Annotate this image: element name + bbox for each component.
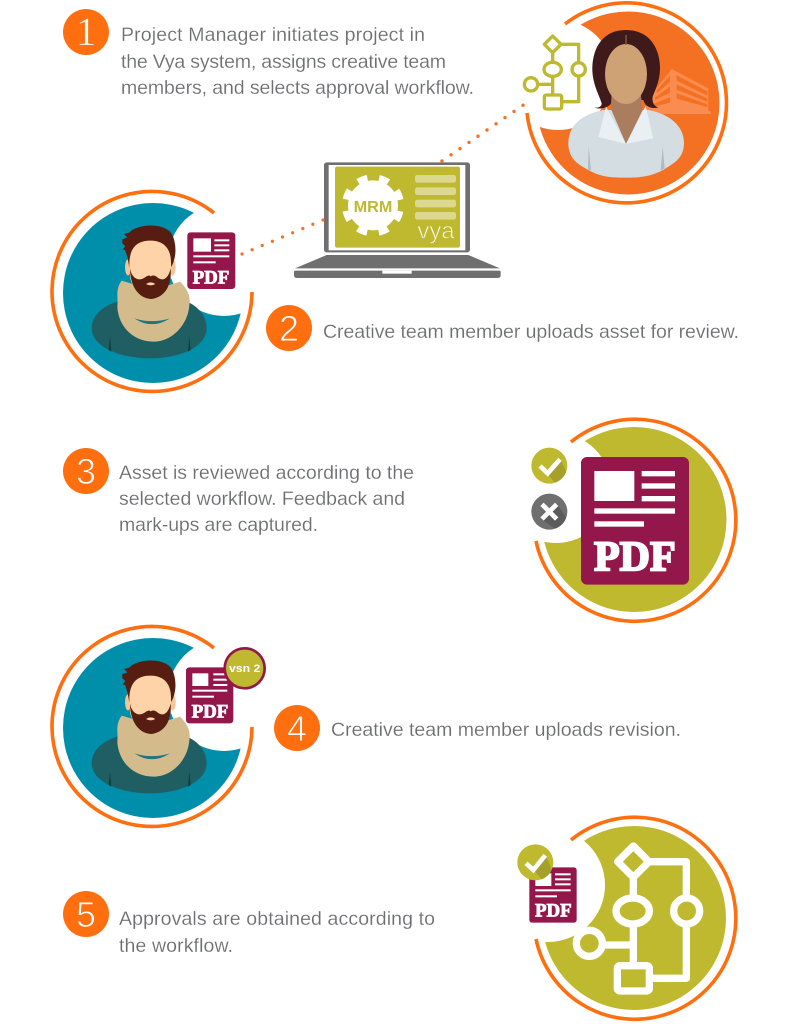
step 3 text: Asset is reviewed according to the <box>119 462 414 484</box>
step 2 number badge: 2 <box>279 308 299 349</box>
step 3 text <box>119 462 414 536</box>
step 3 number badge: 3 <box>76 451 96 492</box>
step 3 number badge <box>63 448 109 494</box>
step 4 number badge <box>274 705 320 751</box>
creative team member with PDF upload <box>52 191 280 391</box>
creative team member with revision version 2 <box>52 626 280 826</box>
step 1 text: the Vya system, assigns creative team <box>121 51 446 73</box>
step 1 text: members, and selects approval workflow. <box>121 77 474 99</box>
dotted connector: laptop to project manager <box>442 99 532 161</box>
step 5 number badge: 5 <box>76 894 96 935</box>
step 4 number badge: 4 <box>287 708 307 749</box>
step 1 number badge: 1 <box>76 9 96 54</box>
dotted connector: PDF to laptop <box>242 220 323 254</box>
creative team member with PDF upload: PDF <box>193 267 229 288</box>
step 5 text: Approvals are obtained according to <box>119 908 435 930</box>
creative team member with revision version 2: vsn 2 <box>229 663 260 675</box>
review illustration: PDF with approve and reject marks <box>501 419 736 621</box>
step 5 number badge <box>63 891 109 937</box>
step 5 text: the workflow. <box>119 935 233 957</box>
project manager illustration <box>503 3 726 203</box>
step 5 text <box>119 908 435 957</box>
step 1 number badge <box>63 9 109 55</box>
step 1 text <box>121 24 474 99</box>
step 3 text: mark-ups are captured. <box>119 514 318 536</box>
approval illustration: workflow diagram with approved PDF: PDF <box>535 901 572 922</box>
step 1 text: Project Manager initiates project in <box>121 24 425 46</box>
step 3 text: selected workflow. Feedback and <box>119 488 405 510</box>
creative team member with revision version 2: PDF <box>192 701 228 722</box>
laptop with MRM gear and vya logo: MRM <box>354 199 392 216</box>
step 4 text: Creative team member uploads revision. <box>331 719 681 741</box>
step 2 number badge <box>266 305 312 351</box>
approval illustration: workflow diagram with approved PDF <box>491 817 736 1019</box>
step 2 text: Creative team member uploads asset for review. <box>323 321 739 343</box>
laptop with MRM gear and vya logo <box>294 162 501 278</box>
review illustration: PDF with approve and reject marks: PDF <box>594 534 676 581</box>
laptop with MRM gear and vya logo: vya <box>417 218 455 244</box>
